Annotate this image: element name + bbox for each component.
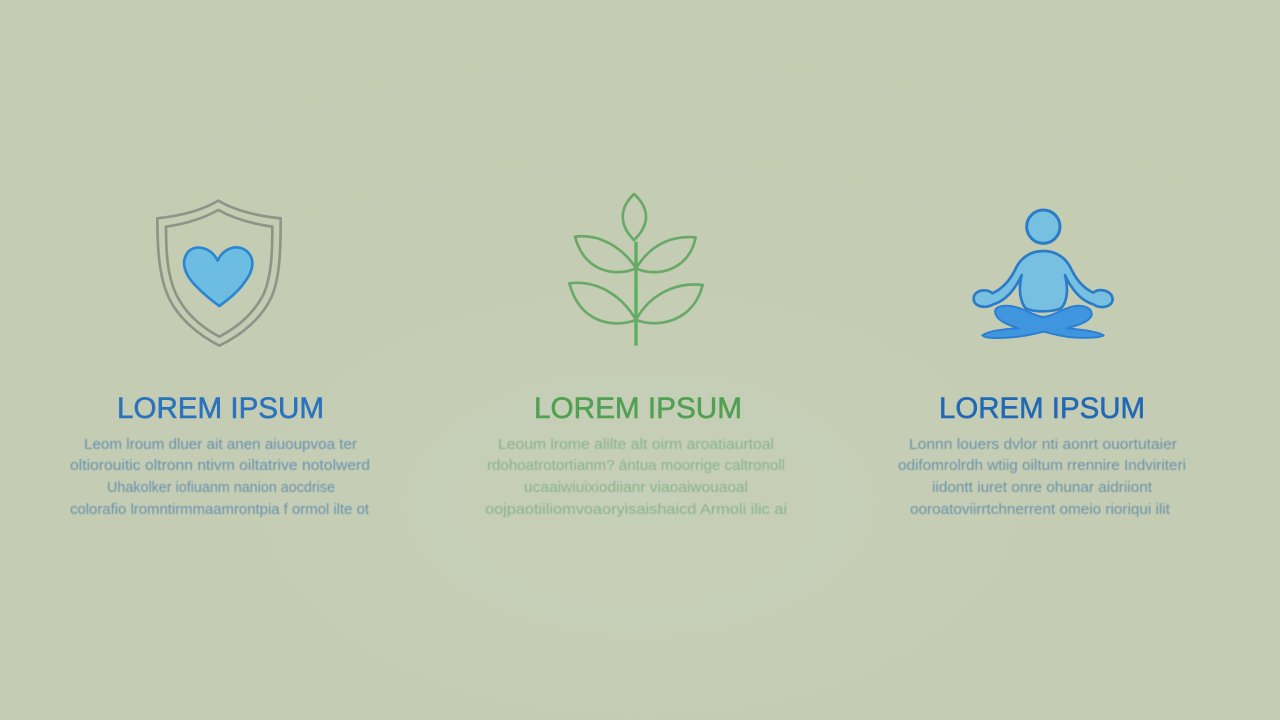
panel: left column <box>70 201 370 518</box>
icon: shield with heart <box>157 201 281 346</box>
text block: left: colorafio lromntirmmaamrontpia f ormol ilte ot <box>70 501 370 518</box>
heading: center: LOREM IPSUM <box>534 392 742 425</box>
text block: right: iidontt iuret onre ohunar aidriiont <box>932 479 1153 496</box>
text block: left: oltiorouitic oltronn ntivm oiltatrive notolwerd <box>70 457 370 474</box>
text block: right: Lonnn louers dvlor nti aonrt ouortutaier <box>909 436 1177 453</box>
text block: center: ucaaiwiuixiodiianr viaoaiwouaoal <box>524 479 748 496</box>
text block: right <box>898 436 1186 518</box>
icon: meditating person <box>974 210 1113 338</box>
text block: center: oojpaotiiliomvoaoryisaishaicd Armoli ilic ai <box>485 501 787 518</box>
text block: center <box>485 436 787 518</box>
text block: left: Leom lroum dluer ait anen aiuoupvoa ter <box>84 436 357 453</box>
text block: left: Uhakolker iofiuanm nanion aocdrise <box>107 479 335 496</box>
heading: right: LOREM IPSUM <box>939 392 1145 425</box>
text block: left <box>70 436 370 518</box>
panel: center column <box>485 194 787 518</box>
panel: right column <box>898 210 1186 518</box>
icon: plant <box>569 194 703 346</box>
text block: center: Leoum lrome alilte alt oirm aroatiaurtoal <box>498 436 774 453</box>
text block: center: rdohoatrotortianm? ántua moorrige caltronoll <box>487 457 785 474</box>
text block: right: ooroatoviirrtchnerrent omeio rioriqui ilit <box>910 501 1171 518</box>
text block: right: odifomrolrdh wtiig oiltum rrennire Indviriteri <box>898 457 1186 474</box>
heading: left: LOREM IPSUM <box>117 392 324 425</box>
